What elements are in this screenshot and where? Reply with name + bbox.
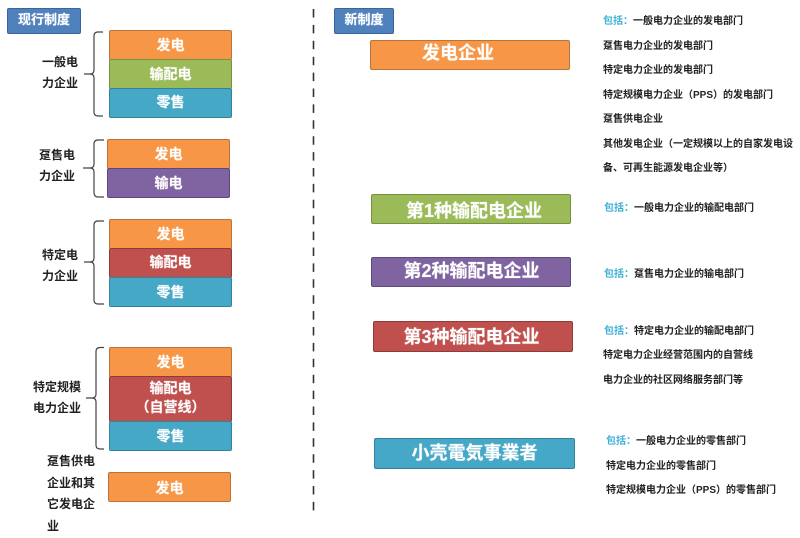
list: generation companies xyxy=(603,15,793,174)
text line: 特定电力企业的发电部门 xyxy=(603,65,713,76)
segment: generation: 发电 xyxy=(156,37,184,53)
text: type 2 includes: 包括：趸售电力企业的输电部门 xyxy=(604,269,744,280)
heading: new system: 新制度 xyxy=(344,12,384,27)
group: wholesale supply and other generators xyxy=(47,454,231,532)
label: wholesale electric utility: 力企业 xyxy=(39,169,75,183)
text line: 趸售电力企业的发电部门 xyxy=(603,41,713,52)
segment: generation: 发电 xyxy=(154,146,182,162)
bar: type 2 transmission and distribution company xyxy=(371,257,571,287)
segment: generation xyxy=(109,347,232,377)
label: wholesale supply and other generators xyxy=(47,454,95,532)
segment: transmission and distribution, self-operated lines xyxy=(109,376,232,422)
group: specified-scale electric utility xyxy=(33,346,232,451)
label: wholesale supply and other generators: 它发电企 xyxy=(47,497,95,511)
segment: generation: 发电 xyxy=(156,480,184,496)
label: general electric utility: 一般电 xyxy=(42,54,78,68)
segment: generation: 发电 xyxy=(156,226,184,242)
group: general electric utility xyxy=(42,30,232,118)
heading: current system: 现行制度 xyxy=(18,12,70,27)
bar: type 1 transmission and distribution company: 第1种输配电企业 xyxy=(406,201,542,221)
bar: type 2 transmission and distribution company: 第2种输配电企业 xyxy=(403,261,540,281)
bar: generation companies: 发电企业 xyxy=(422,43,494,63)
segment: transmission and distribution xyxy=(109,59,232,89)
bar: type 3 transmission and distribution company xyxy=(373,321,573,352)
label: specified-scale electric utility: 特定规模 xyxy=(33,380,81,394)
label: specified electric utility: 特定电 xyxy=(42,248,78,262)
bracket: general electric utility xyxy=(84,31,103,117)
segment: generation xyxy=(107,139,230,169)
bar: small electricity retailers: 小壳電気事業者 xyxy=(412,443,538,463)
segment: generation xyxy=(109,219,232,249)
segment: transmission and distribution, self-operated lines: 输配电 xyxy=(150,380,192,396)
group: wholesale electric utility xyxy=(39,139,230,198)
segment: retail xyxy=(109,277,232,307)
label: wholesale electric utility: 趸售电 xyxy=(39,148,75,162)
segment: generation xyxy=(109,30,232,60)
label: specified electric utility xyxy=(42,248,78,283)
segment: transmission and distribution xyxy=(109,248,232,278)
segment: transmission and distribution: 输配电 xyxy=(150,66,192,82)
text line: 特定电力企业的零售部门 xyxy=(606,461,716,472)
text line: 包括：一般电力企业的零售部门 xyxy=(606,436,746,447)
list: retailers include xyxy=(606,435,776,496)
list: type 3 includes xyxy=(603,325,754,386)
segment: retail: 零售 xyxy=(156,94,184,110)
text line: 特定规模电力企业（PPS）的零售部门 xyxy=(606,485,776,496)
segment: transmission: 输电 xyxy=(154,175,182,191)
group: specified electric utility xyxy=(42,219,232,307)
segment: transmission and distribution, self-operated lines: （自营线） xyxy=(136,398,206,414)
text line: 包括：一般电力企业的发电部门 xyxy=(603,16,743,27)
bar: small electricity retailers xyxy=(374,438,575,469)
bar: type 1 transmission and distribution company xyxy=(371,194,571,224)
bar: type 3 transmission and distribution company: 第3种输配电企业 xyxy=(403,327,540,347)
segment: generation xyxy=(108,472,231,502)
segment: transmission xyxy=(107,168,230,198)
segment: transmission and distribution: 输配电 xyxy=(150,254,192,270)
label: wholesale supply and other generators: 趸售供电 xyxy=(47,454,95,468)
text line: 备、可再生能源发电企业等） xyxy=(603,163,733,174)
bracket: specified-scale electric utility xyxy=(86,346,104,450)
bracket: specified electric utility xyxy=(84,220,104,305)
text line: 趸售供电企业 xyxy=(603,114,663,125)
text line: 其他发电企业（一定规模以上的自家发电设 xyxy=(603,139,793,150)
segment: retail: 零售 xyxy=(156,428,184,444)
bar: generation companies xyxy=(370,40,570,70)
label: specified electric utility: 力企业 xyxy=(42,269,78,283)
label: wholesale electric utility xyxy=(39,148,75,183)
label: wholesale supply and other generators: 企业和其 xyxy=(47,476,95,490)
label: general electric utility xyxy=(42,54,78,90)
bracket: wholesale electric utility xyxy=(83,139,104,198)
text line: 特定规模电力企业（PPS）的发电部门 xyxy=(603,90,773,101)
label: specified-scale electric utility: 电力企业 xyxy=(33,401,81,415)
segment: retail: 零售 xyxy=(156,284,184,300)
segment: retail xyxy=(109,421,232,451)
text line: 特定电力企业经营范围内的自营线 xyxy=(603,350,753,361)
text line: 电力企业的社区网络服务部门等 xyxy=(603,375,743,386)
segment: generation: 发电 xyxy=(156,354,184,370)
heading: current system xyxy=(7,8,81,34)
label: wholesale supply and other generators: 业 xyxy=(47,518,59,532)
segment: retail xyxy=(109,88,232,118)
panel: current system xyxy=(7,8,232,532)
panel: new system xyxy=(334,8,793,496)
label: specified-scale electric utility xyxy=(33,380,81,415)
label: general electric utility: 力企业 xyxy=(42,76,78,90)
text: type 1 includes: 包括：一般电力企业的输配电部门 xyxy=(604,203,754,214)
heading: new system xyxy=(334,8,394,34)
text line: 包括：特定电力企业的输配电部门 xyxy=(604,326,754,337)
